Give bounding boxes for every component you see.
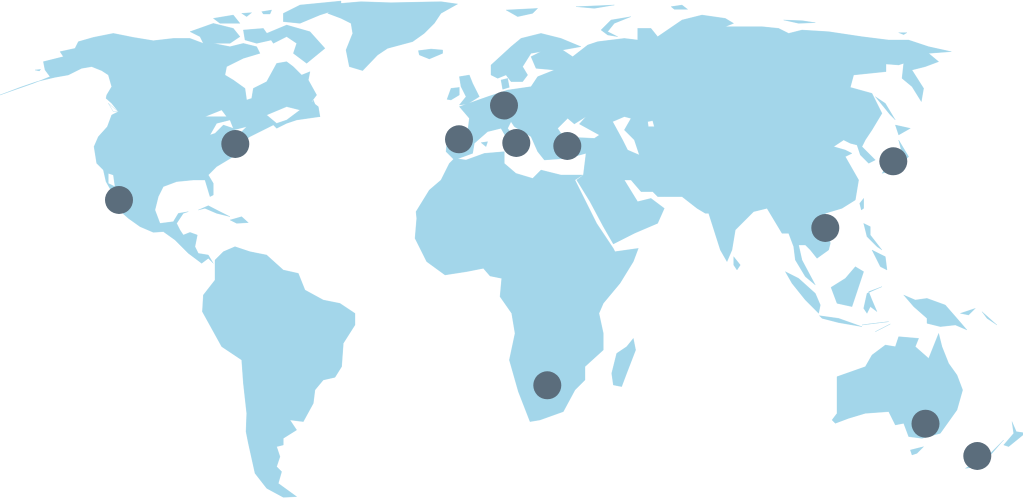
ireland <box>447 87 459 100</box>
region: Japan and east Asian islands <box>784 20 910 250</box>
marker: Australia <box>912 410 940 438</box>
sri lanka <box>734 257 740 270</box>
marker: Mexico <box>105 186 133 214</box>
tasmania <box>910 447 924 455</box>
inland seas <box>558 117 654 155</box>
mediterranean islands <box>481 142 488 147</box>
borneo <box>831 267 864 307</box>
britain <box>459 75 479 105</box>
region: Maritime Asia and Oceania <box>734 250 1023 468</box>
philippines <box>872 250 887 270</box>
region: North America <box>0 1 341 263</box>
marker: Italy <box>502 129 530 157</box>
new zealand <box>965 422 1023 468</box>
region: Africa <box>415 152 638 422</box>
java and sunda islands <box>819 316 890 332</box>
location markers <box>105 92 991 470</box>
newfoundland <box>305 100 320 117</box>
new guinea <box>904 295 967 330</box>
marker: Japan <box>879 147 907 175</box>
lakes and gulfs <box>108 103 300 187</box>
sulawesi <box>864 287 882 313</box>
marker: South Africa <box>533 371 561 399</box>
marker: New Zealand <box>963 442 991 470</box>
alaska island <box>35 69 41 71</box>
marker: Turkey <box>553 132 581 160</box>
denmark <box>501 78 509 89</box>
marker: US East Coast <box>221 130 249 158</box>
madagascar <box>612 338 636 387</box>
region: South America <box>202 247 355 497</box>
marker: Spain <box>445 125 473 153</box>
arctic islands <box>190 1 341 63</box>
caribbean islands <box>198 206 248 223</box>
marker: Vietnam <box>811 214 839 242</box>
australia <box>832 333 963 438</box>
pacific islands <box>960 308 997 325</box>
sumatra <box>785 272 820 313</box>
region: Greenland, Iceland and northern islands <box>328 2 688 71</box>
region: Eurasia <box>446 15 951 285</box>
marker: Central Europe <box>490 92 518 120</box>
